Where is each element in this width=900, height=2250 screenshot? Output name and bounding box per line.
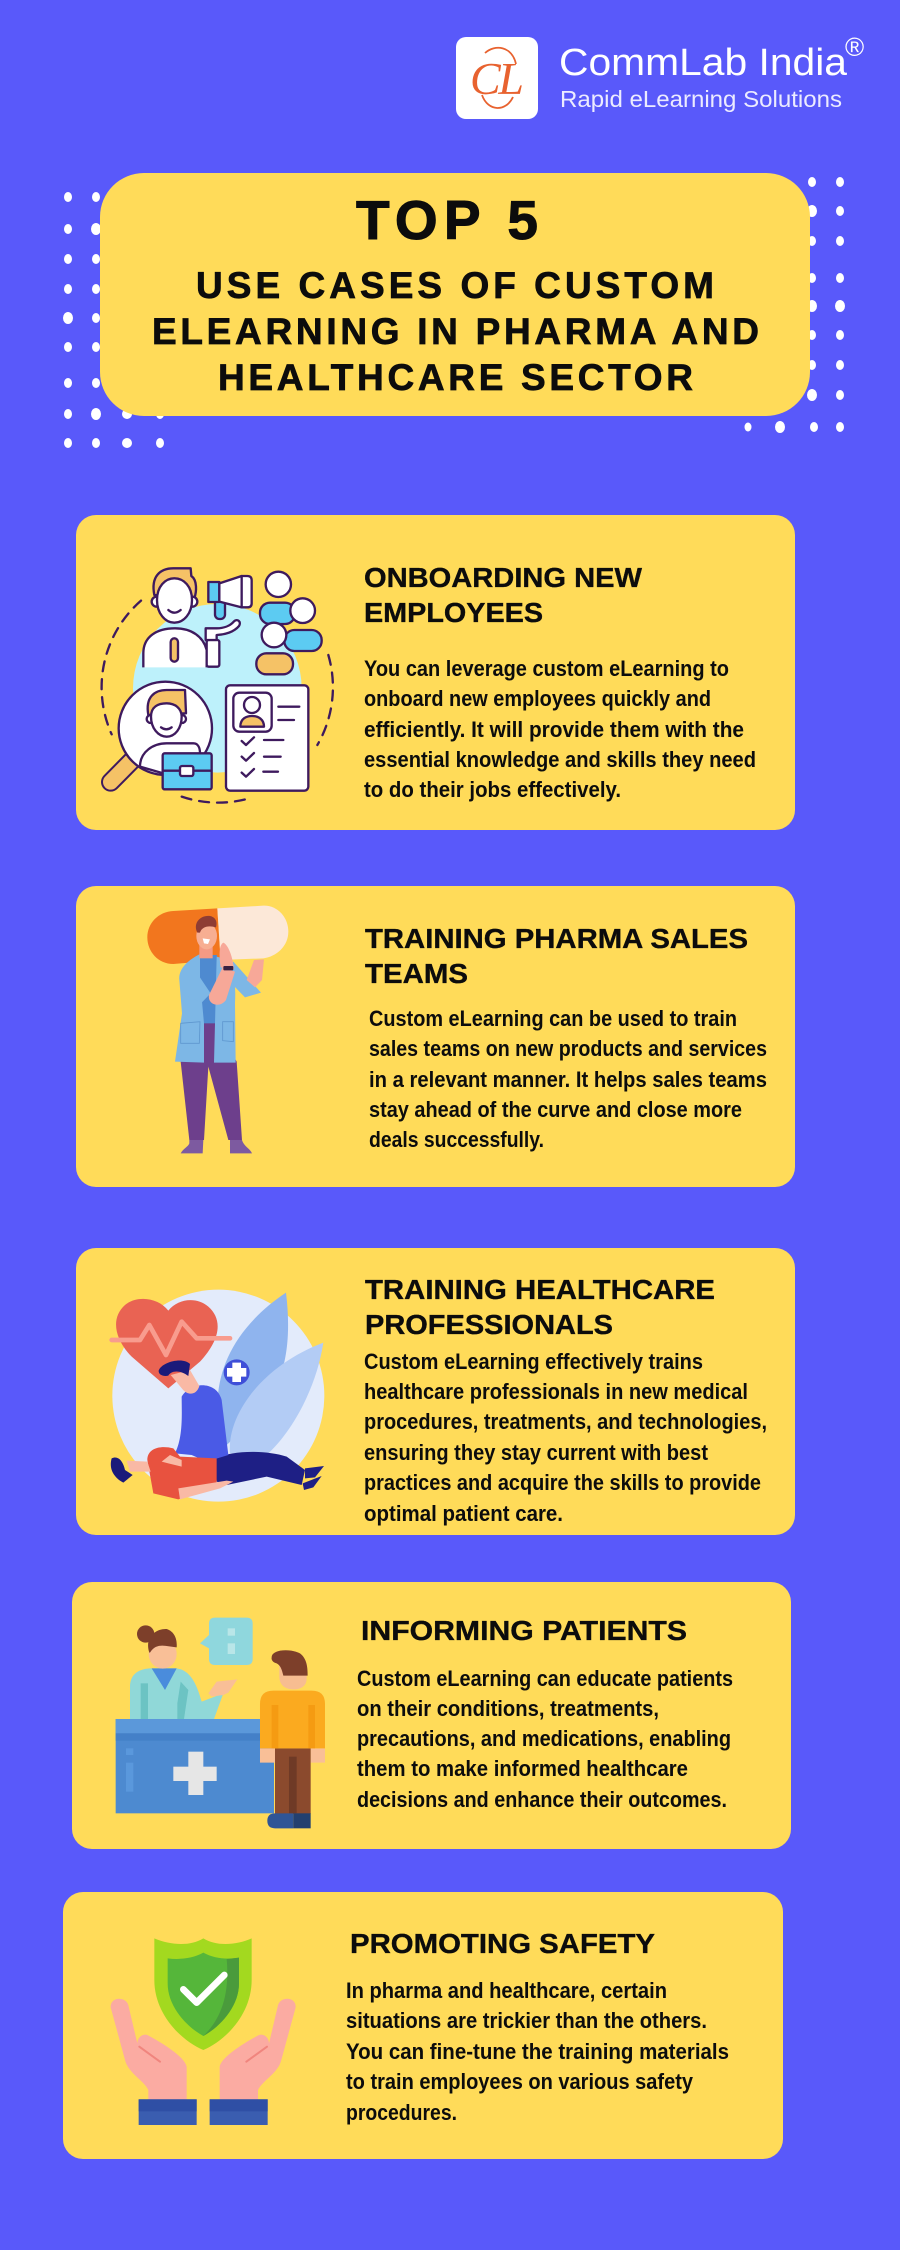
body text: on their conditions, treatments, (357, 1696, 659, 1721)
heading: ONBOARDING NEW (364, 562, 643, 593)
body text: You can fine-tune the training materials (346, 2039, 729, 2064)
body text: decisions and enhance their outcomes. (357, 1787, 727, 1812)
body text: Custom eLearning effectively trains (364, 1349, 703, 1374)
body text: Custom eLearning can educate patients (357, 1666, 733, 1691)
body text: to train employees on various safety (346, 2069, 694, 2094)
body text: sales teams on new products and services (369, 1036, 767, 1061)
logo: CommLab India: Rapid eLearning Solutions (560, 86, 842, 112)
group of people (256, 572, 322, 674)
body text: onboard new employees quickly and (364, 686, 711, 711)
logo: CommLab India (456, 32, 864, 119)
heading: TRAINING PHARMA SALES (365, 923, 748, 954)
body text: efficiently. It will provide them with the (364, 717, 744, 742)
panel: informing patients (72, 1582, 791, 1849)
logo: CommLab India: ® (845, 32, 864, 62)
title banner: HEALTHCARE SECTOR (218, 357, 693, 398)
body text: practices and acquire the skills to provide (364, 1470, 761, 1495)
panel: training healthcare professionals (76, 1248, 795, 1535)
body text: Custom eLearning can be used to train (369, 1006, 737, 1031)
body text (369, 1006, 767, 1152)
body text (364, 656, 756, 802)
body text: them to make informed healthcare (357, 1756, 688, 1781)
body text: situations are trickier than the others. (346, 2008, 707, 2033)
body text: precautions, and medications, enabling (357, 1726, 731, 1751)
heading (365, 1274, 715, 1340)
title banner: TOP 5 (356, 189, 538, 251)
body text (346, 1978, 729, 2125)
icon: onboarding illustration (102, 568, 333, 803)
panel: onboarding new employees (76, 515, 795, 830)
body text: in a relevant manner. It helps sales teams (369, 1067, 767, 1092)
title banner (100, 173, 810, 416)
logo: CommLab India: CL (470, 53, 524, 104)
heading: INFORMING PATIENTS (361, 1615, 687, 1646)
body text: In pharma and healthcare, certain (346, 1978, 667, 2003)
body text: to do their jobs effectively. (364, 777, 621, 802)
body text: procedures, treatments, and technologies, (364, 1409, 767, 1434)
magnifier and briefcase (111, 682, 212, 789)
heading (364, 562, 643, 628)
body text: You can leverage custom eLearning to (364, 656, 729, 681)
heading: TEAMS (365, 958, 468, 989)
title banner: ELEARNING IN PHARMA AND (152, 311, 759, 352)
heading (365, 923, 748, 989)
body text: ensuring they stay current with best (364, 1440, 709, 1465)
panel: promoting safety (63, 1892, 783, 2159)
body text: healthcare professionals in new medical (364, 1379, 748, 1404)
title banner: USE CASES OF CUSTOM (196, 265, 714, 306)
decorative dots left (63, 192, 164, 448)
body text: deals successfully. (369, 1127, 544, 1152)
man with megaphone (143, 568, 252, 667)
icon: CPR illustration (111, 1290, 324, 1502)
heading: PROMOTING SAFETY (350, 1928, 655, 1959)
body text: essential knowledge and skills they need (364, 747, 756, 772)
body text (364, 1349, 767, 1526)
icon: hands holding shield (111, 1938, 296, 2125)
body text: procedures. (346, 2100, 457, 2125)
body text: optimal patient care. (364, 1501, 563, 1526)
resume document (226, 685, 308, 791)
body text: stay ahead of the curve and close more (369, 1097, 742, 1122)
heading: EMPLOYEES (364, 597, 543, 628)
icon: doctor carrying capsule (147, 906, 288, 1153)
panel: training pharma sales teams (76, 886, 795, 1187)
body text (357, 1666, 733, 1812)
decorative dots right (744, 177, 845, 433)
heading: PROFESSIONALS (365, 1309, 613, 1340)
heading: TRAINING HEALTHCARE (365, 1274, 715, 1305)
icon: reception desk with nurse and patient (116, 1618, 325, 1828)
logo: CommLab India: CommLab India (559, 42, 848, 84)
